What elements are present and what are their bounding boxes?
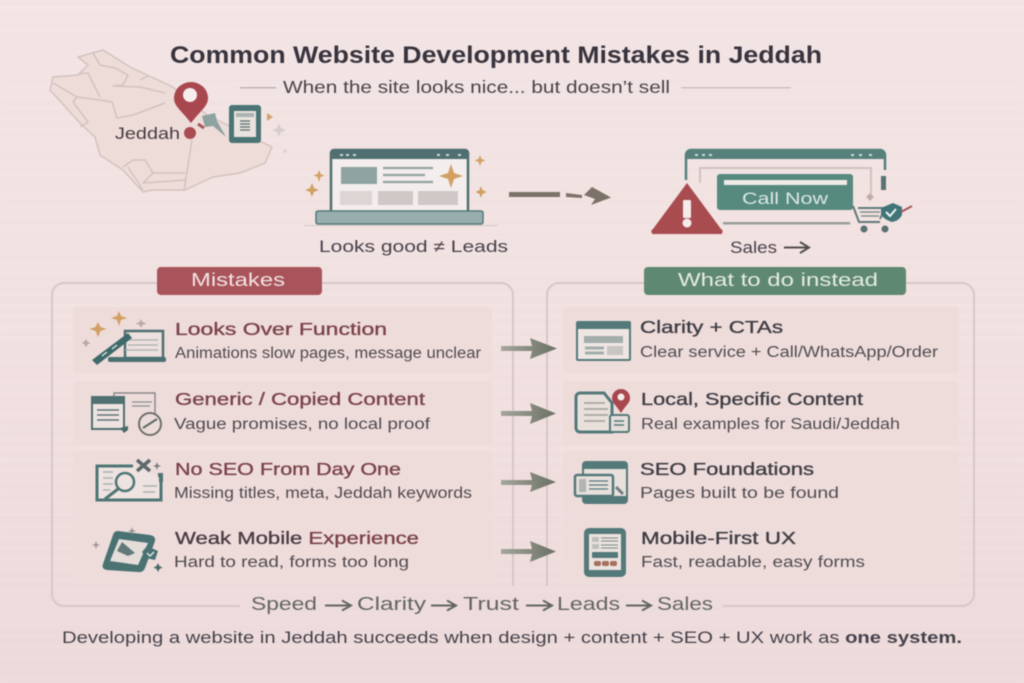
- panel: what to do instead rows: [563, 307, 959, 583]
- footer statement: Developing a website in Jeddah succeeds when design + content + SEO + UX work as one system.: [62, 629, 962, 647]
- flow: speed to sales: Sales: [657, 593, 713, 614]
- map outline: [50, 50, 272, 192]
- arrow 2: [501, 403, 556, 424]
- subtitle: When the site looks nice... but doesn’t sell: [283, 77, 670, 97]
- arrow 4: [501, 541, 556, 562]
- title: Common Website Development Mistakes in Jeddah: [170, 42, 822, 69]
- row: generic copied content: [73, 381, 492, 445]
- caption: sales: Sales: [730, 239, 777, 257]
- row: clarity ctas: [563, 307, 959, 373]
- browser with call now: [651, 150, 912, 234]
- map label: Jeddah: [115, 125, 180, 143]
- laptop illustration: [304, 150, 498, 226]
- panel outer: mistakes: [52, 283, 513, 606]
- icon: broken phone: [92, 527, 162, 572]
- row: no seo: [73, 452, 492, 515]
- icon: phone form: [584, 528, 626, 577]
- icon: laptop and wand: [82, 311, 166, 365]
- row: weak mobile: Weak Mobile Experience: [175, 528, 419, 548]
- icon: copied pages and gauge: [92, 393, 161, 435]
- badge: what to do instead: What to do instead: [678, 270, 878, 290]
- row: no seo: No SEO From Day One: [175, 459, 401, 479]
- flow: speed to sales: [251, 593, 713, 614]
- badge: mistakes: Mistakes: [191, 270, 285, 290]
- arrow 3: [501, 472, 556, 492]
- row: mobile first: [563, 522, 959, 583]
- warning triangle: [651, 183, 723, 234]
- arrow 1: [501, 338, 557, 359]
- button: call now: [717, 174, 853, 210]
- row: seo foundations: [563, 452, 959, 515]
- flow: speed to sales: Trust: [463, 593, 519, 614]
- row: seo foundations: SEO Foundations: [640, 459, 814, 479]
- row: local content: Real examples for Saudi/Jeddah: [641, 416, 900, 433]
- icon: devices: [575, 462, 627, 503]
- icon: document and pin: [576, 389, 630, 432]
- Saudi map with Jeddah pin: [50, 50, 287, 192]
- dashed arrow: [509, 187, 611, 205]
- row: generic copied content: Vague promises, no local proof: [174, 416, 431, 433]
- caption: sales: [730, 239, 809, 257]
- badge: what to do instead: [644, 267, 906, 295]
- caption: looks good: Looks good ≠ Leads: [319, 238, 508, 256]
- icon: search with x: [97, 460, 161, 500]
- row: weak mobile: [73, 522, 492, 583]
- row: looks over function: [73, 307, 492, 373]
- row: clarity ctas: Clarity + CTAs: [640, 317, 783, 337]
- row: generic copied content: Generic / Copied Content: [175, 389, 425, 409]
- row: mobile first: Mobile-First UX: [641, 528, 796, 548]
- row: local content: Local, Specific Content: [641, 389, 863, 409]
- row: local content: [563, 381, 959, 445]
- row: no seo: Missing titles, meta, Jeddah keywords: [174, 485, 472, 502]
- row: weak mobile: Hard to read, forms too long: [174, 554, 409, 571]
- flow: speed to sales: Speed: [251, 593, 317, 614]
- badge: mistakes: [157, 267, 322, 295]
- panel outer: what to do instead: [547, 283, 974, 606]
- flow: speed to sales: Clarity: [357, 593, 427, 614]
- row: seo foundations: Pages built to be found: [640, 485, 839, 502]
- pin: [174, 82, 208, 123]
- button: call now: Call Now: [742, 189, 829, 208]
- phone icon: [229, 105, 261, 143]
- panel: mistakes rows: [73, 307, 492, 583]
- arrows between panels: [501, 338, 557, 562]
- icon: browser layout: [577, 322, 630, 360]
- row: clarity ctas: Clear service + Call/WhatsApp/Order: [640, 344, 938, 361]
- row: looks over function: Looks Over Function: [175, 319, 387, 339]
- row: mobile first: Fast, readable, easy forms: [641, 554, 865, 571]
- flow: speed to sales: Leads: [557, 593, 620, 614]
- pointer to phone: [202, 113, 226, 137]
- row: looks over function: Animations slow pages, message unclear: [175, 345, 481, 362]
- cart: [853, 203, 912, 232]
